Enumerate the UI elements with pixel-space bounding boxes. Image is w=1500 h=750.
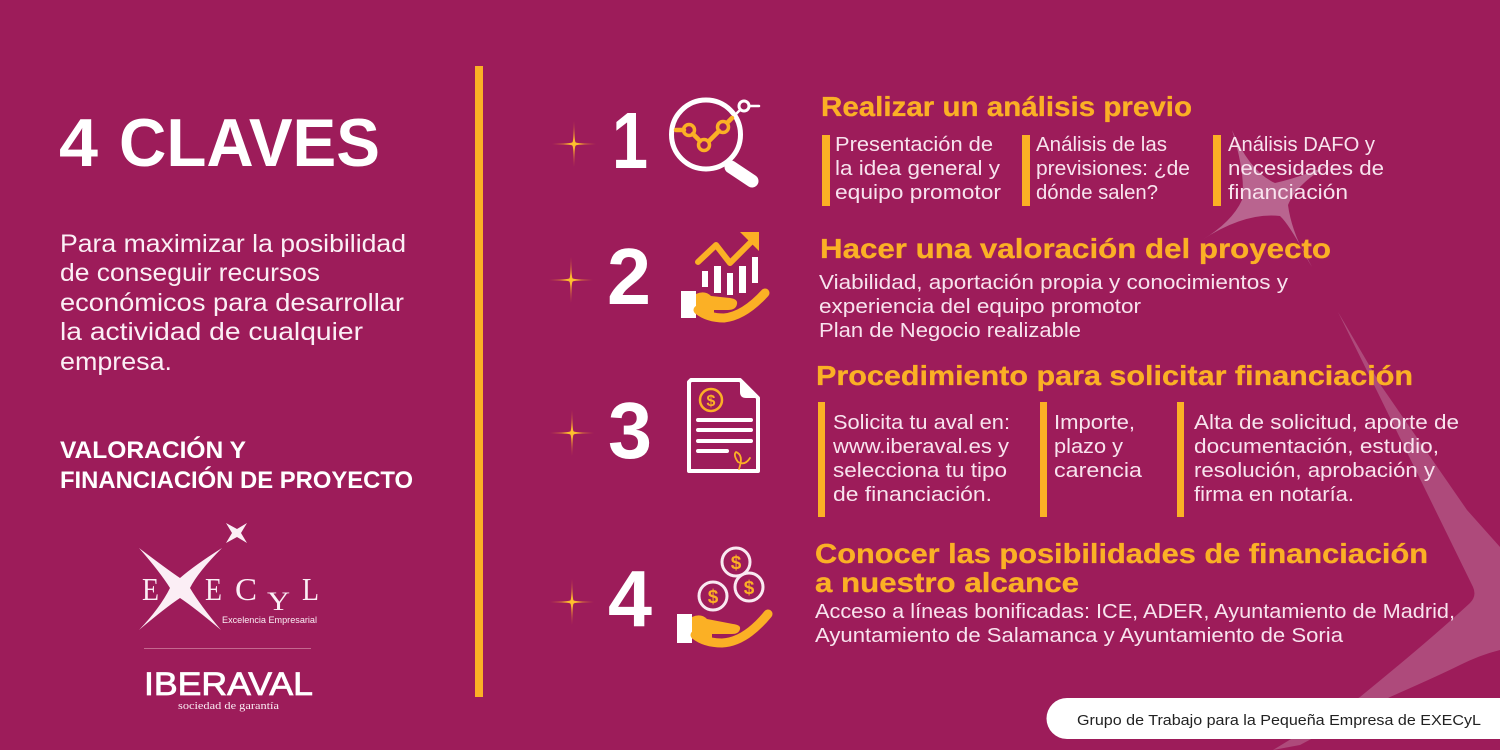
step 4: [550, 538, 1455, 647]
star marker 3: [550, 410, 594, 456]
star marker 2: [549, 257, 593, 303]
column 1.3: [1213, 133, 1384, 206]
subtitle: FINANCIACIÓN DE PROYECTO: [60, 466, 413, 494]
footer credit pill: [1046, 698, 1500, 739]
column 3.2: [1040, 402, 1143, 517]
step 2: [549, 232, 1331, 342]
description 2: experiencia del equipo promotor: [819, 295, 1141, 318]
icon: magnifier with chart: [672, 100, 759, 181]
number 1: 1: [612, 96, 648, 185]
logo: Iberaval: IBERAVAL: [144, 666, 313, 702]
column 3.1: [818, 402, 1010, 517]
column 3.2: plazo y: [1054, 435, 1124, 458]
column 3.3: [1177, 402, 1459, 517]
column 3.2: Importe,: [1054, 411, 1135, 434]
logo: EXECyL: Y: [267, 587, 290, 616]
column 3.2: carencia: [1054, 459, 1143, 482]
icon: signed document: $: [707, 393, 716, 410]
column 1.1: equipo promotor: [835, 181, 1001, 204]
description 2: Viabilidad, aportación propia y conocimientos y: [819, 271, 1289, 294]
column 3.1: de financiación.: [833, 483, 992, 506]
description 2: Plan de Negocio realizable: [819, 319, 1081, 342]
logo: EXECyL: E: [142, 571, 159, 607]
heading 1: Realizar un análisis previo: [821, 91, 1192, 122]
intro paragraph: Para maximizar la posibilidad: [60, 230, 406, 258]
decorative large star: [1273, 312, 1500, 750]
column 1.3: necesidades de: [1228, 157, 1384, 180]
column 1.2: Análisis de las: [1036, 133, 1167, 156]
logo: Iberaval: [144, 648, 313, 712]
heading 3: Procedimiento para solicitar financiación: [816, 360, 1413, 391]
heading 4: [815, 538, 1428, 598]
column 3.3: resolución, aprobación y: [1194, 459, 1436, 482]
logo: EXECyL: Excelencia Empresarial: [222, 615, 317, 626]
logo: Iberaval: sociedad de garantía: [178, 700, 279, 712]
step 3: [550, 360, 1459, 517]
column 1.1: [822, 133, 1001, 206]
description 4: [815, 600, 1455, 647]
step 1: [552, 91, 1384, 206]
icon: hand with coins: $: [744, 578, 755, 599]
column 1.2: dónde salen?: [1036, 181, 1158, 204]
logo: EXECyL: E: [205, 571, 222, 607]
star marker 1: [552, 121, 596, 167]
description 2: [819, 271, 1289, 342]
footer credit pill: Grupo de Trabajo para la Pequeña Empresa de EXECyL: [1077, 712, 1481, 729]
description 4: Ayuntamiento de Salamanca y Ayuntamiento de Soria: [815, 624, 1344, 647]
logo: EXECyL: C: [235, 571, 257, 607]
heading 4: Conocer las posibilidades de financiación: [815, 538, 1428, 569]
intro paragraph: la actividad de cualquier: [60, 318, 363, 346]
column 3.3: documentación, estudio,: [1194, 435, 1439, 458]
column 1.3: Análisis DAFO y: [1228, 133, 1376, 156]
logo: EXECyL: L: [302, 571, 319, 607]
intro paragraph: empresa.: [60, 348, 172, 376]
column 1.2: previsiones: ¿de: [1036, 157, 1190, 180]
logo: EXECyL: [139, 523, 319, 630]
icon: hand with coins: [677, 548, 768, 643]
intro paragraph: [60, 230, 406, 376]
description 4: Acceso a líneas bonificadas: ICE, ADER, Ayuntamiento de Madrid,: [815, 600, 1455, 623]
column 3.3: Alta de solicitud, aporte de: [1194, 411, 1459, 434]
number 3: 3: [608, 386, 652, 475]
column 3.1: www.iberaval.es y: [832, 435, 1010, 458]
column 3.1: selecciona tu tipo: [833, 459, 1007, 482]
column 1.1: Presentación de: [835, 133, 993, 156]
left column: [59, 105, 413, 712]
column 3.1: Solicita tu aval en:: [833, 411, 1010, 434]
decorative small star: [1202, 130, 1342, 267]
intro paragraph: de conseguir recursos: [60, 259, 320, 287]
subtitle: [60, 436, 413, 494]
title: 4: [59, 105, 98, 181]
column 1.3: financiación: [1228, 181, 1348, 204]
icon: hand with growth chart: [681, 232, 765, 318]
icon: hand with coins: $: [708, 587, 719, 608]
column 1.1: la idea general y: [835, 157, 1001, 180]
star marker 4: [550, 579, 594, 625]
number 2: 2: [607, 232, 651, 321]
icon: signed document: [689, 380, 758, 471]
column 3.3: firma en notaría.: [1194, 483, 1354, 506]
title: CLAVES: [119, 105, 380, 181]
divider bar: [475, 66, 483, 697]
intro paragraph: económicos para desarrollar: [60, 289, 404, 317]
heading 4: a nuestro alcance: [815, 567, 1079, 598]
subtitle: VALORACIÓN Y: [60, 436, 246, 464]
number 4: 4: [608, 554, 652, 643]
heading 2: Hacer una valoración del proyecto: [820, 233, 1331, 264]
column 1.2: [1022, 133, 1190, 206]
icon: hand with coins: $: [731, 553, 742, 574]
